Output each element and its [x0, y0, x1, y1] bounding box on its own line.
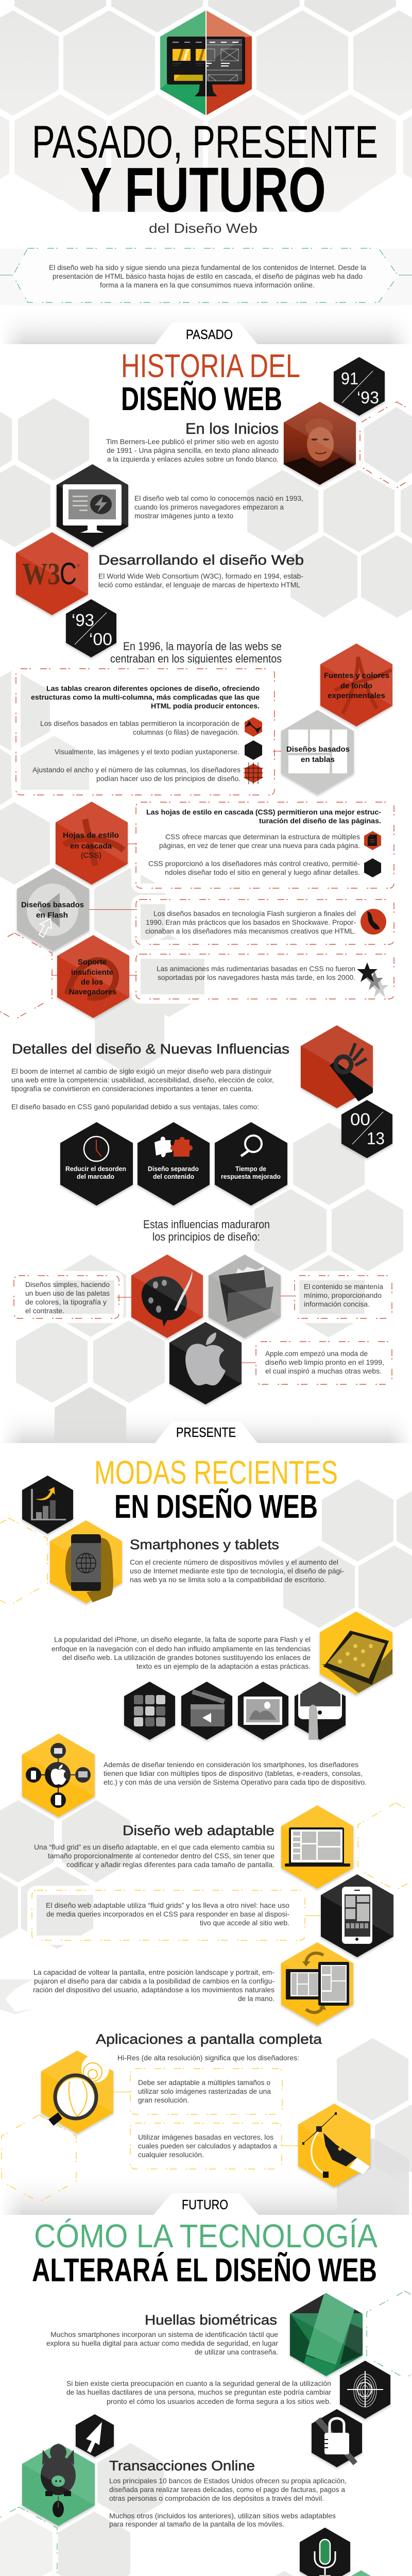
hexagon: fuentes y colores: Fuentes y colores — [324, 671, 389, 680]
section: desarrollando el diseño web: Desarrollando el diseño Web — [98, 552, 304, 568]
text: nacimiento del diseño web: cuando los primeros navegadores empezaron a — [134, 503, 284, 511]
benefit: tiempo de respuesta: Tiempo de — [235, 1165, 266, 1173]
section: huellas biométricas: Huellas biométricas — [145, 2312, 277, 2328]
section: smartphones y tablets: uso de Internet mediante este tipo de tecnología, el diseño de pági- — [130, 1567, 344, 1575]
section: transacciones online: Los principales 10 bancos de Estados Unidos ofrecen su propia aplicación, — [109, 2477, 347, 2485]
section: diseño web adaptable — [34, 1823, 274, 1869]
icon: logo hexagon with monitor — [160, 10, 252, 115]
section: transacciones online — [109, 2458, 347, 2528]
callout: contenido mínimo: información concisa. — [304, 1300, 370, 1308]
badge: years 93-00: ‘93 — [72, 611, 94, 630]
panel: media queries: de media queries incorporados en el CSS para responder en base al disposi- — [46, 1910, 289, 1918]
icon: piggy bank hexagon — [22, 2443, 95, 2526]
subheading: estas influencias: Estas influencias maduraron — [143, 1218, 270, 1231]
hexagon: soporte insuficiente: de los — [81, 978, 103, 987]
section: detalles del diseño — [11, 1041, 289, 1111]
hexagon: soporte insuficiente — [52, 935, 137, 1018]
hexagon: diseños basados en flash — [17, 868, 137, 951]
callout: imágenes rasterizadas: gran resolución. — [138, 2096, 189, 2104]
section: detalles del diseño: El diseño basado en CSS ganó popularidad debido a sus ventajas, tales como: — [11, 1103, 259, 1111]
section: diseño web adaptable: Una “fluid grid” es un diseño adaptable, en el que cada elemento cambia su — [34, 1843, 274, 1851]
heading: modas recientes: MODAS RECIENTES — [94, 1454, 338, 1491]
section: transacciones online: diseñada para realizar tareas delicadas, como el pago de facturas, pagos a — [109, 2485, 345, 2494]
icon: app grid hexagon — [124, 1682, 175, 1740]
icon: touch screen hexagon — [295, 1682, 346, 1740]
hexagon: fuentes y colores: experimentales — [328, 691, 385, 700]
photo: Tim Berners-Lee — [284, 402, 356, 485]
text: popularidad del iphone: texto es un ejemplo de la adaptación a estas prácticas. — [136, 1662, 311, 1670]
section: smartphones y tablets: Smartphones y tablets — [130, 1537, 279, 1552]
panel: animaciones: Las animaciones más rudimentarias basadas en CSS no fueron — [157, 964, 355, 973]
callout: imágenes vectoriales — [130, 2123, 298, 2169]
hexagon: hojas de estilo en cascada — [56, 802, 137, 885]
section: detalles del diseño: Detalles del diseño & Nuevas Influencias — [12, 1041, 289, 1057]
badge: years 91-93: ‘93 — [357, 388, 379, 407]
text: múltiples dispositivos: etc.) y con más de una versión de Sistema Operativo para cada tipo de dispositivo. — [104, 1778, 367, 1786]
heading: historia del diseño web — [121, 347, 300, 417]
panel: tablas: columnas (o filas) de navegación. — [133, 728, 239, 736]
section: desarrollando el diseño web: El World Wide Web Consortium (W3C), formado en 1994, estab- — [98, 572, 303, 580]
section: transacciones online: para responder al tamaño de la pantalla de los móviles. — [109, 2520, 284, 2528]
hexagon: soporte insuficiente: Soporte — [78, 958, 107, 967]
panel: tablas: Los diseños basados en tablas permitieron la incorporación de — [40, 719, 239, 727]
section: transacciones online: Transacciones Online — [109, 2458, 255, 2473]
decoration: dashed hexagon right — [360, 402, 412, 488]
icon: fingerprint target hexagon — [340, 2361, 390, 2419]
section: en los inicios: de 1991 - Una página sencilla, en texto plano alineado — [107, 446, 279, 454]
text: seguridad de huellas: Si bien existe cierta preocupación en cuanto a la seguridad general de la utilización — [66, 2379, 331, 2387]
text: seguridad de huellas — [66, 2379, 331, 2405]
callout: diseños simples: Diseños simples, haciendo — [25, 1280, 110, 1289]
panel: tablas: Las tablas crearon diferentes opciones de diseño, ofreciendo — [46, 684, 260, 692]
section: en los inicios: a la izquierda y enlaces azules sobre un fondo blanco. — [107, 455, 279, 463]
section: huellas biométricas — [46, 2312, 278, 2356]
icon: magnifier hexagon — [41, 2050, 113, 2133]
section: en los inicios: Tim Berners-Lee publicó el primer sitio web en agosto — [106, 437, 279, 446]
callout: diseños simples — [14, 1276, 131, 1318]
subheading: estas influencias: los principios de diseño: — [152, 1230, 260, 1243]
text: voltear la pantalla: ración del dispositivo del usuario, adaptándose a los movimientos naturales — [33, 1986, 274, 1994]
subheading: estas influencias — [143, 1218, 270, 1243]
callout: imágenes vectoriales: cuales pueden ser calculados y adaptados a — [138, 2142, 277, 2150]
section: huellas biométricas: explora su huella digital para actuar como medida de seguridad, en lugar — [46, 2339, 278, 2347]
icon: laptop hexagon — [281, 1805, 353, 1889]
callout: apple.com: el cual inspiró a muchas otras webs. — [265, 1367, 382, 1375]
decoration: dashed hexagon left yellow — [2, 2115, 76, 2202]
hexagon: soporte insuficiente: insuficiente — [71, 968, 113, 977]
callout: imágenes vectoriales: Utilizar imágenes basadas en vectores, los — [138, 2133, 273, 2141]
panel: tablas: podían hacer uso de los principios de diseño. — [96, 774, 241, 783]
hexagon: diseños basados en flash: Diseños basados — [21, 901, 84, 909]
icon: chart hexagon — [22, 1476, 73, 1534]
panel: flash: 1990. Eran más prácticos que los basados en Shockwave. Propor- — [146, 918, 356, 926]
badge: years 00-13 — [341, 1100, 392, 1158]
panel: flash: cionaban a los diseñadores más mecanismos creativos que HTML. — [145, 927, 356, 935]
section: huellas biométricas: Muchos smartphones incorporan un sistema de identificación táctil que — [50, 2330, 278, 2338]
icon: glasses hexagon — [325, 2570, 397, 2576]
benefit: reducir el desorden: Reducir el desorden — [65, 1165, 126, 1173]
panel: tablas — [16, 669, 282, 795]
section: aplicaciones a pantalla completa: Aplicaciones a pantalla completa — [96, 2031, 322, 2047]
callout: diseños simples: de colores, la tipografía y — [25, 1298, 107, 1306]
callout: diseños simples: el contraste. — [25, 1307, 64, 1315]
panel: tablas: Ajustando el ancho y el número de las columnas, los diseñadores — [32, 766, 241, 774]
panel: hojas de estilo: Las hojas de estilo en cascada (CSS) permitieron una mejor estruc- — [146, 808, 381, 816]
text: popularidad del iphone: La popularidad del iPhone, un diseño elegante, la falta de soporte para Flash y el — [54, 1635, 311, 1643]
callout: contenido mínimo — [281, 1276, 392, 1318]
callout: imágenes vectoriales: cualquier resolución. — [138, 2150, 204, 2159]
badge: years 91-93: 91 — [341, 369, 358, 388]
section tab: pasado: PASADO — [186, 327, 233, 342]
title: Y FUTURO — [80, 155, 326, 226]
heading: modas recientes: EN DISEÑO WEB — [114, 1488, 318, 1525]
badge: years 00-13: 00 — [350, 1110, 370, 1129]
callout: imágenes rasterizadas: utilizar solo imágenes rasterizadas de una — [138, 2087, 271, 2095]
hexagon: fuentes y colores: de fondo — [340, 682, 372, 690]
section: transacciones online: Muchos otros (incluidos los anteriores), utilizan sitios webs adaptables — [109, 2512, 336, 2520]
text: nacimiento del diseño web — [134, 494, 303, 520]
icon: iphone hexagon — [320, 1612, 392, 1694]
panel: flash: Los diseños basados en tecnología Flash surgieron a finales del — [153, 909, 356, 918]
section: detalles del diseño: tipografía se convirtieron en consideraciones importantes a tener en cuenta. — [11, 1084, 253, 1093]
callout: contenido mínimo: mínimo, proporcionando — [304, 1291, 382, 1299]
hexagon: fuentes y colores — [320, 643, 392, 726]
icon: folder hexagon — [209, 1255, 281, 1338]
heading: historia del diseño web: DISEÑO WEB — [121, 380, 282, 417]
heading: cómo la tecnología — [32, 2217, 377, 2289]
text: popularidad del iphone: del diseño web. La utilización de grandes botones sustituyendo los enlaces de — [62, 1653, 311, 1662]
benefit: reducir el desorden: del marcado — [77, 1173, 114, 1180]
hexagon: soporte insuficiente: Navegadores — [69, 988, 116, 996]
icon: W3C hexagon: C — [60, 556, 77, 591]
panel: media queries: El diseño web adaptable utiliza “fluid grids” y los lleva a otro nivel: hace uso — [46, 1901, 289, 1909]
hexagon: diseños basados en tablas: en tablas — [301, 755, 335, 764]
subheading: en 1996: En 1996, la mayoría de las webs se — [123, 640, 282, 653]
text: voltear la pantalla: de la mano. — [238, 1994, 274, 2003]
section: aplicaciones a pantalla completa: Hi-Res (de alta resolución) significa que los diseñadores: — [117, 2054, 299, 2062]
decoration: dashed hexagon left green — [0, 2507, 57, 2576]
panel: animaciones — [136, 954, 394, 999]
icon: W3C hexagon: W3 — [22, 557, 60, 591]
section: diseño web adaptable: tamaño proporcionalmente al contenedor dentro del CSS, sin tener que — [48, 1852, 274, 1860]
benefit: diseño separado — [138, 1122, 210, 1206]
title: del Diseño Web — [149, 221, 258, 236]
panel: animaciones: soportadas por los navegadores hasta más tarde, en los 2000. — [158, 973, 355, 981]
decoration: dashed hexagon right green — [367, 2291, 412, 2378]
panel: tablas: Visualmente, las imágenes y el texto podían yuxtaponerse. — [55, 748, 239, 756]
section: detalles del diseño: El boom de internet al cambio de siglo exigió un mejor diseño web para distinguir — [11, 1067, 271, 1075]
panel: intro — [0, 248, 412, 302]
icon: W3C hexagon — [16, 532, 88, 615]
icon: W3C hexagon: ® — [77, 563, 80, 568]
benefit: diseño separado: del contenido — [153, 1173, 194, 1180]
panel: hojas de estilo: turación del diseño de las páginas. — [259, 817, 381, 825]
panel: intro: El diseño web ha sido y sigue siendo una pieza fundamental de los contenidos de Internet. Desde la — [49, 263, 366, 272]
text: voltear la pantalla: La capacidad de voltear la pantalla, entre posición landscape y portrait, em- — [33, 1968, 274, 1976]
heading: cómo la tecnología: CÓMO LA TECNOLOGÍA — [34, 2217, 377, 2255]
decoration: dashed hexagon right yellow — [358, 1803, 412, 1890]
text: popularidad del iphone — [52, 1635, 311, 1670]
section: diseño web adaptable: codificar y añadir reglas diferentes para cada tamaño de pantalla. — [66, 1860, 274, 1869]
section tab: futuro — [153, 2193, 259, 2215]
benefit: tiempo de respuesta: respuesta mejorado — [221, 1173, 281, 1180]
section: diseño web adaptable: Diseño web adaptable — [123, 1823, 274, 1838]
icon: apple hexagon — [169, 1322, 242, 1404]
section: smartphones y tablets: nas web ya no se limita solo a la compatibilidad de escritorio. — [130, 1575, 326, 1584]
panel: tablas: HTML podía producir entonces. — [151, 702, 260, 710]
icon: pen tool hexagon — [298, 2104, 370, 2187]
section tab: pasado — [155, 323, 258, 344]
text: voltear la pantalla — [33, 1968, 274, 2003]
text: seguridad de huellas: de las huellas dactilares de una persona, muchos se preguntan este podría cambiar — [66, 2388, 331, 2396]
callout: diseños simples: un buen uso de las paletas — [25, 1289, 110, 1297]
hexagon: diseños basados en tablas — [281, 710, 354, 794]
section: huellas biométricas: de utilizar una contraseña. — [195, 2348, 278, 2356]
heading: historia del diseño web: HISTORIA DEL — [121, 347, 300, 384]
callout: imágenes rasterizadas — [113, 2069, 282, 2114]
icon: hand hexagon — [301, 1025, 373, 1108]
section: smartphones y tablets: Con el creciente número de dispositivos móviles y el aumento del — [130, 1558, 338, 1566]
panel: hojas de estilo: CSS proporcionó a los diseñadores más control creativo, permitié- — [148, 859, 360, 868]
section tab: futuro: FUTURO — [182, 2197, 228, 2212]
callout: apple.com — [242, 1342, 392, 1384]
callout: imágenes rasterizadas: Debe ser adaptable a múltiples tamaños o — [138, 2078, 270, 2087]
hexagon: diseños basados en flash: en Flash — [36, 911, 68, 920]
decoration: dashed hexagon left — [0, 933, 52, 1020]
icon: tablets hexagon — [281, 1942, 353, 2025]
panel: tablas: estructuras como la multi-columna, más complicadas que las que — [31, 693, 260, 701]
section: desarrollando el diseño web — [98, 552, 304, 589]
badge: years 00-13: 13 — [367, 1129, 385, 1148]
icon: microphone hexagon — [300, 2528, 350, 2576]
icon: monitor hexagon — [57, 464, 128, 547]
callout: apple.com: diseño web limpio pronto en el 1999, — [265, 1358, 384, 1366]
badge: years 91-93 — [334, 357, 385, 416]
text: múltiples dispositivos: tienen que lidiar con múltiples tipos de dispositivo (tabletas, e-readers, consolas, — [104, 1769, 363, 1777]
callout: apple.com: Apple.com empezó una moda de — [265, 1349, 368, 1358]
icon: cursor hexagon — [76, 2414, 114, 2457]
section: en los inicios — [106, 420, 279, 463]
text: múltiples dispositivos: Además de diseñar teniendo en consideración los smartphones, los diseñadores — [104, 1760, 358, 1769]
panel: hojas de estilo: ndoles diseñar todo el sitio en general y luego afinar detalles. — [165, 868, 360, 876]
badge: years 93-00: ‘00 — [89, 630, 112, 649]
panel: intro: presentación de HTML básico hasta hojas de estilo en cascada, el diseño de páginas web ha dado — [53, 272, 363, 280]
callout: contenido mínimo: El contenido se mantenía — [304, 1282, 383, 1291]
decoration: dashed hexagon yellow — [0, 1518, 47, 1605]
hexagon: hojas de estilo en cascada: Hojas de estilo — [63, 831, 119, 840]
text: múltiples dispositivos — [104, 1760, 367, 1786]
background: header honeycomb — [0, 0, 412, 306]
section: desarrollando el diseño web: leció como estándar, el lenguaje de marcas de hipertexto HTML — [98, 581, 300, 589]
panel: intro: forma a la manera en la que consumimos nueva información online. — [100, 281, 315, 289]
panel: media queries — [32, 1890, 321, 1940]
icon: lock hexagon — [312, 2409, 362, 2467]
text: voltear la pantalla: pujaron el diseño para dar cabida a la posibilidad de cambios en la configu- — [34, 1977, 274, 1985]
panel: media queries: tivo que accede al sitio web. — [200, 1919, 289, 1927]
icon: fingerprint phone hexagon — [290, 2293, 363, 2378]
section: smartphones y tablets — [130, 1537, 344, 1584]
section: en los inicios: En los Inicios — [185, 420, 279, 437]
panel: hojas de estilo: CSS ofrece marcas que determinan la estructura de múltiples — [165, 833, 360, 841]
panel: hojas de estilo — [136, 802, 394, 888]
subheading: en 1996 — [110, 640, 282, 665]
icon: devices hexagon — [22, 1734, 95, 1817]
hexagon: hojas de estilo en cascada: (CSS) — [81, 851, 101, 860]
section tab: presente — [155, 1421, 258, 1443]
icon: phone in hand hexagon — [50, 1520, 122, 1603]
subheading: en 1996: centraban en los siguientes elementos — [110, 652, 282, 665]
hexagon: diseños basados en tablas: Diseños basados — [286, 745, 350, 754]
hexagon: hojas de estilo en cascada: en cascada — [70, 842, 112, 851]
text: seguridad de huellas: pronto el cómo los usuarios acceden de forma segura a los sitios web. — [107, 2397, 331, 2405]
badge: years 93-00 — [66, 599, 116, 657]
panel: flash — [136, 900, 394, 944]
section: transacciones online: otras personas o comprobación de los depósitos a través del móvil. — [109, 2494, 324, 2502]
icon: clapperboard hexagon — [181, 1682, 232, 1740]
title — [32, 116, 378, 236]
text: nacimiento del diseño web: mostrar imágenes junto a texto — [134, 512, 233, 520]
benefit: diseño separado: Diseño separado — [148, 1165, 199, 1173]
section: detalles del diseño: una web entre la competencia: usabilidad, accesibilidad, diseño, elección de color, — [11, 1076, 274, 1084]
panel: hojas de estilo: páginas, en vez de tener que crear una nueva para cada página. — [159, 841, 360, 850]
icon: picture hexagon — [238, 1682, 288, 1740]
section: aplicaciones a pantalla completa — [96, 2031, 322, 2062]
benefit: reducir el desorden — [60, 1122, 133, 1206]
icon: palette hexagon — [131, 1255, 203, 1338]
section tab: presente: PRESENTE — [176, 1425, 236, 1440]
heading: modas recientes — [94, 1454, 338, 1525]
benefit: tiempo de respuesta — [215, 1122, 287, 1206]
text: popularidad del iphone: enfoque en la navegación con el dedo han influido ampliamente en las tendencias — [52, 1645, 311, 1653]
icon: responsive phone hexagon — [321, 1874, 393, 1957]
text: nacimiento del diseño web: El diseño web tal como lo conocemos nació en 1993, — [134, 494, 303, 502]
